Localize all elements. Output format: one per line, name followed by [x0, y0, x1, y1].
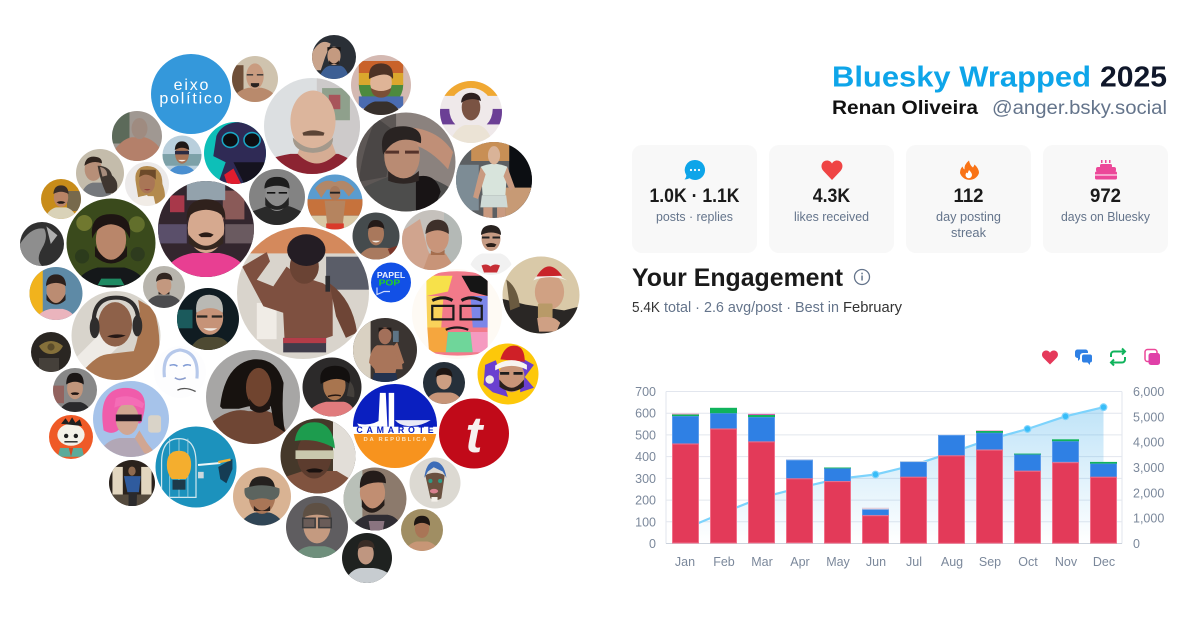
chart legend icons: [1042, 348, 1160, 366]
stat value: 1.0K · 1.1K: [650, 186, 740, 207]
user name and handle: @anger.bsky.social: [992, 98, 1167, 119]
panel: days on Bluesky card: [1043, 145, 1168, 253]
avatar: man with hand on head: [143, 266, 185, 308]
left axis labels: 500: [635, 428, 656, 442]
icon: heart: [822, 160, 842, 180]
avatar: woman with blonde hair: [125, 162, 169, 206]
bars: reposts: [672, 408, 1117, 468]
engagement summary text: February: [843, 300, 903, 316]
left axis labels: [635, 385, 656, 551]
avatar: red t logo: t: [466, 406, 485, 463]
avatar: Camarote da Republica logo: CAMAROTE: [356, 425, 434, 435]
avatar: light bulb in a cage: [156, 426, 236, 508]
month labels: Jun: [866, 555, 886, 569]
bars: likes: [672, 429, 1116, 543]
avatar: black and white torso: [20, 222, 64, 266]
avatar: Vader cartoon: [204, 122, 266, 184]
icon: birthday cake: [1095, 160, 1117, 180]
avatar: illustrated man on rainbow: [351, 55, 411, 115]
left axis labels: 300: [635, 472, 656, 486]
cumulative line: [686, 407, 1104, 528]
avatar: older man with glasses: [177, 288, 239, 350]
month labels: Mar: [751, 555, 773, 569]
avatar: eixo politico logo: político: [159, 91, 223, 108]
bars: quotes: [672, 414, 1003, 509]
avatar: man in grey t-shirt: [342, 533, 392, 583]
avatar: Camarote da Republica logo: [353, 384, 437, 472]
right axis labels: [1133, 385, 1164, 551]
avatar: man in Santa hat with phone: [502, 256, 580, 334]
heading: Your Engagement: Your Engagement: [632, 264, 844, 292]
stat value: 112: [954, 186, 984, 207]
left axis labels: 400: [635, 450, 656, 464]
avatar: bearded man in trees: [66, 198, 156, 288]
month labels: Apr: [790, 555, 810, 569]
avatar: red t logo: [439, 398, 509, 468]
avatar: man in Santa hat on yellow: [478, 344, 538, 404]
month labels: [675, 555, 1115, 569]
engagement summary text: [632, 300, 903, 316]
month labels: Nov: [1055, 555, 1078, 569]
right axis labels: 0: [1133, 537, 1140, 551]
avatar: curly-haired man in pink polo: [302, 358, 362, 416]
cumulative points: [872, 404, 1107, 478]
avatar: eixo politico logo: [151, 54, 231, 134]
avatar: orange cartoon character: [49, 415, 93, 459]
avatar: man on yellow with books: [41, 179, 81, 219]
month labels: Jul: [906, 555, 922, 569]
avatar: bald man small: [232, 56, 278, 102]
avatar: bearded man on blue and yellow: [30, 267, 83, 320]
month labels: Aug: [941, 555, 963, 569]
right axis labels: 3,000: [1133, 461, 1164, 475]
right axis labels: 2,000: [1133, 486, 1164, 500]
month labels: Sep: [979, 555, 1001, 569]
avatar: shirtless selfie: [353, 318, 417, 382]
avatar: illustrated man purple yellow ring: [440, 81, 502, 143]
avatar: cookie face: [410, 458, 460, 508]
month labels: May: [826, 555, 851, 569]
icon: reposts legend arrows: [1111, 348, 1125, 366]
month labels: Dec: [1093, 555, 1115, 569]
avatar: colourful painted face: [412, 269, 502, 359]
panel: avatar bubble cluster: [20, 35, 580, 583]
avatar: Papel Pop logo: [371, 262, 411, 302]
avatar: dark ornate figure: [31, 332, 71, 372]
panel: posting streak card: [906, 145, 1031, 253]
avatar: man with dog: [76, 149, 124, 197]
avatar: man raising arm: [402, 210, 462, 270]
panel: likes card: [769, 145, 894, 253]
stat label second line: streak: [951, 226, 987, 240]
icon: flame: [960, 160, 979, 180]
icon: speech bubble: [684, 160, 705, 180]
avatar: smiling man in headphones: [72, 291, 160, 380]
icon: quotes legend squares: [1145, 350, 1160, 365]
icon: info: [854, 270, 870, 284]
avatar: shirtless man at beach: [308, 174, 362, 230]
avatar: person in pink wig: [93, 381, 169, 457]
title: Bluesky Wrapped: [832, 62, 1091, 94]
avatar: young man with mustache: [53, 368, 97, 412]
stat label: likes received: [794, 210, 869, 224]
bars: replies: [672, 413, 1116, 515]
avatar: man in glasses hand on head: [356, 112, 456, 212]
right axis labels: 4,000: [1133, 436, 1164, 450]
panel: posts and replies card: [632, 145, 757, 253]
icon: likes legend heart: [1042, 350, 1058, 364]
month labels: Jan: [675, 555, 695, 569]
avatar: large bald man: [264, 78, 360, 174]
avatar: man's bare back: [112, 111, 162, 161]
month labels: Oct: [1018, 555, 1038, 569]
left axis labels: 600: [635, 407, 656, 421]
avatar: sketch portrait of woman: [162, 348, 199, 392]
avatar: man wearing eye mask: [233, 468, 291, 526]
stat label: days on Bluesky: [1061, 210, 1151, 224]
avatar: man in warm brown background: [401, 509, 443, 551]
avatar: Camarote da Republica logo: DA REPÚBLICA: [363, 436, 427, 443]
avatar: man with grey glasses: [286, 496, 348, 558]
avatar: Papel Pop logo: PAPEL: [377, 271, 405, 280]
avatar: man with long dreadlocks: [206, 350, 300, 444]
title: 2025: [1100, 62, 1167, 94]
avatar: main shirtless man flexing: [237, 227, 369, 359]
user name and handle: [832, 98, 1167, 119]
grid lines: [666, 392, 1122, 544]
stat label: posts · replies: [656, 210, 733, 224]
avatar: Papel Pop logo: POP: [379, 279, 401, 288]
avatar: black and white bearded man: [249, 169, 305, 225]
avatar: eixo politico logo: eixo: [174, 77, 208, 94]
avatar: man standing in dark doorway: [109, 460, 155, 506]
stat value: 972: [1090, 186, 1121, 207]
avatar: man with arm behind head: [312, 35, 356, 79]
right axis labels: 6,000: [1133, 385, 1164, 399]
right axis labels: 1,000: [1133, 512, 1164, 526]
avatar: man in sunglasses at beach: [162, 136, 202, 174]
avatar: man in pink shirt: [158, 181, 254, 277]
user name and handle: Renan Oliveira: [832, 98, 978, 119]
stat label: day posting: [936, 210, 1001, 224]
month labels: Feb: [713, 555, 735, 569]
avatar: dark-haired smiling man: [352, 212, 400, 260]
chart: monthly engagement stacked bars with cumulative line: [635, 385, 1164, 569]
left axis labels: 700: [635, 385, 656, 399]
avatar: man with green bandana: [280, 418, 356, 494]
right axis labels: 5,000: [1133, 410, 1164, 424]
icon: replies legend bubbles: [1075, 350, 1092, 365]
cumulative area: [686, 407, 1104, 544]
stat value: 4.3K: [813, 186, 851, 207]
avatar: mustached man in white shirt: [470, 225, 512, 275]
avatar: man in gym: [456, 142, 532, 218]
left axis labels: 200: [635, 494, 656, 508]
avatar: young man dark background: [423, 362, 465, 404]
left axis labels: 100: [635, 515, 656, 529]
engagement summary text: total · 2.6 avg/post · Best in: [664, 300, 839, 316]
engagement summary text: 5.4K: [632, 300, 660, 316]
left axis labels: 0: [649, 537, 656, 551]
avatar: smiling bearded man: [344, 468, 406, 530]
